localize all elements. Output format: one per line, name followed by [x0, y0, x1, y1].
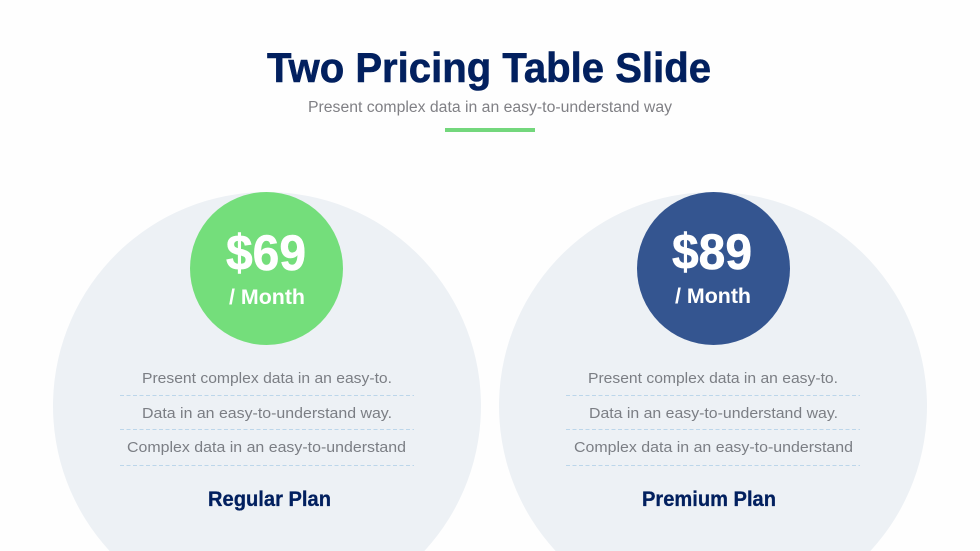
- feature list: Complex data in an easy-to-understand: [574, 439, 853, 456]
- plan name: Premium Plan: [642, 488, 776, 511]
- panel background circle: [499, 192, 927, 551]
- feature list: Data in an easy-to-understand way.: [142, 405, 392, 422]
- plan name: Regular Plan: [208, 488, 331, 511]
- price badge: $69 per month: $69: [226, 225, 306, 281]
- feature list: Complex data in an easy-to-understand: [127, 439, 406, 456]
- price badge: $89 per month: / Month: [675, 285, 751, 308]
- feature list: Present complex data in an easy-to.: [588, 370, 838, 387]
- feature list: Present complex data in an easy-to.: [142, 370, 392, 387]
- price badge: $69 per month: [190, 192, 343, 345]
- price badge: $89 per month: [637, 192, 790, 345]
- feature list: Data in an easy-to-understand way.: [589, 405, 838, 422]
- title accent underline: [445, 128, 535, 132]
- subtitle: Present complex data in an easy-to-understand way: [308, 99, 672, 116]
- panel: premium plan: [499, 192, 927, 551]
- price badge: $69 per month: / Month: [229, 286, 305, 309]
- price badge: $89 per month: $89: [672, 224, 752, 280]
- panel background circle: [53, 192, 481, 551]
- feature list: [566, 370, 860, 466]
- panel: regular plan: [53, 192, 481, 551]
- title: Two Pricing Table Slide: [267, 44, 711, 91]
- feature list: [120, 370, 414, 466]
